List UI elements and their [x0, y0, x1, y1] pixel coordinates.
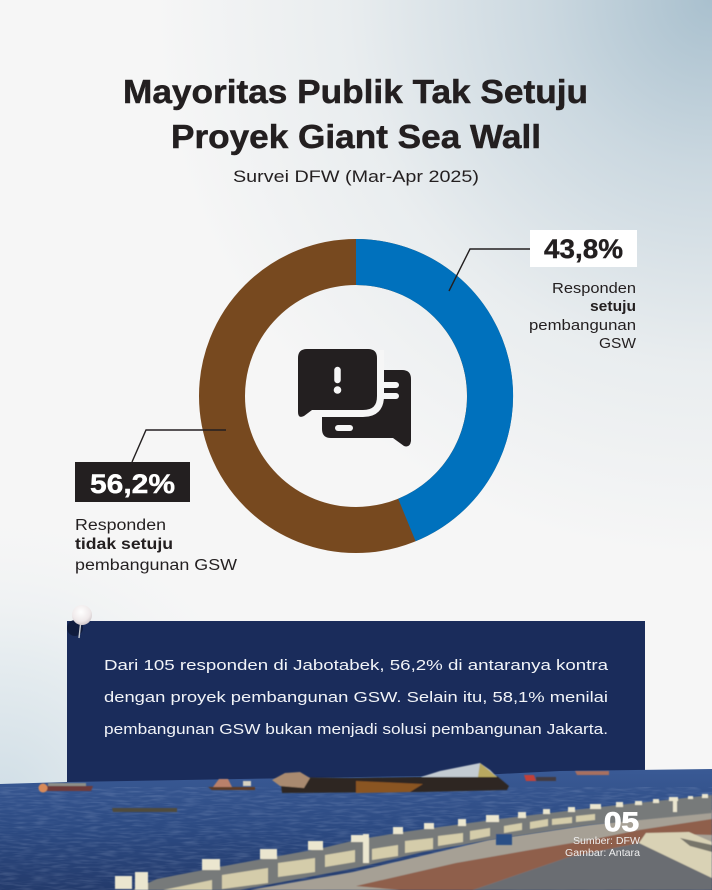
summary text: dengan proyek pembangunan GSW. Selain itu, 58,1% menilai — [104, 689, 608, 706]
subtitle: Survei DFW (Mar-Apr 2025) — [233, 168, 479, 186]
description: setuju — [590, 298, 636, 315]
ships — [38, 763, 609, 812]
page number: 05 — [604, 807, 639, 837]
source credits: Gambar: Antara — [565, 848, 640, 859]
summary text: Dari 105 responden di Jabotabek, 56,2% di antaranya kontra — [104, 657, 609, 674]
icon: chat bubbles with exclamation mark — [298, 349, 411, 446]
source credits — [565, 836, 641, 859]
icon: push pin — [67, 605, 92, 638]
title: Proyek Giant Sea Wall — [171, 118, 541, 155]
leader line — [132, 430, 226, 462]
summary text — [104, 657, 609, 738]
leader line — [449, 249, 530, 291]
segment: setuju 43,8% — [356, 262, 490, 520]
donut chart — [222, 262, 490, 530]
sea — [0, 769, 712, 890]
description: pembangunan — [529, 317, 636, 334]
panel: summary text — [67, 621, 645, 786]
description: tidak setuju — [75, 536, 173, 553]
title — [123, 73, 588, 155]
summary text: pembangunan GSW bukan menjadi solusi pembangunan Jakarta. — [104, 721, 608, 738]
road and shore — [250, 810, 712, 890]
value box — [530, 230, 637, 267]
source credits: Sumber: DFW — [573, 836, 641, 847]
title: Mayoritas Publik Tak Setuju — [123, 73, 588, 110]
callout: 56,2% tidak setuju — [75, 430, 237, 574]
value box — [75, 462, 190, 502]
description: pembangunan GSW — [75, 557, 237, 574]
description — [75, 517, 237, 574]
value box: 56,2% — [90, 469, 175, 499]
description: Responden — [75, 517, 166, 534]
value box: 43,8% — [544, 234, 623, 264]
description — [529, 280, 637, 352]
description: Responden — [552, 280, 636, 297]
segment: tidak setuju 56,2% — [222, 262, 490, 530]
photo: sea and sea wall — [0, 763, 712, 890]
railing — [115, 794, 712, 890]
description: GSW — [599, 335, 637, 352]
callout: 43,8% setuju — [449, 230, 637, 352]
